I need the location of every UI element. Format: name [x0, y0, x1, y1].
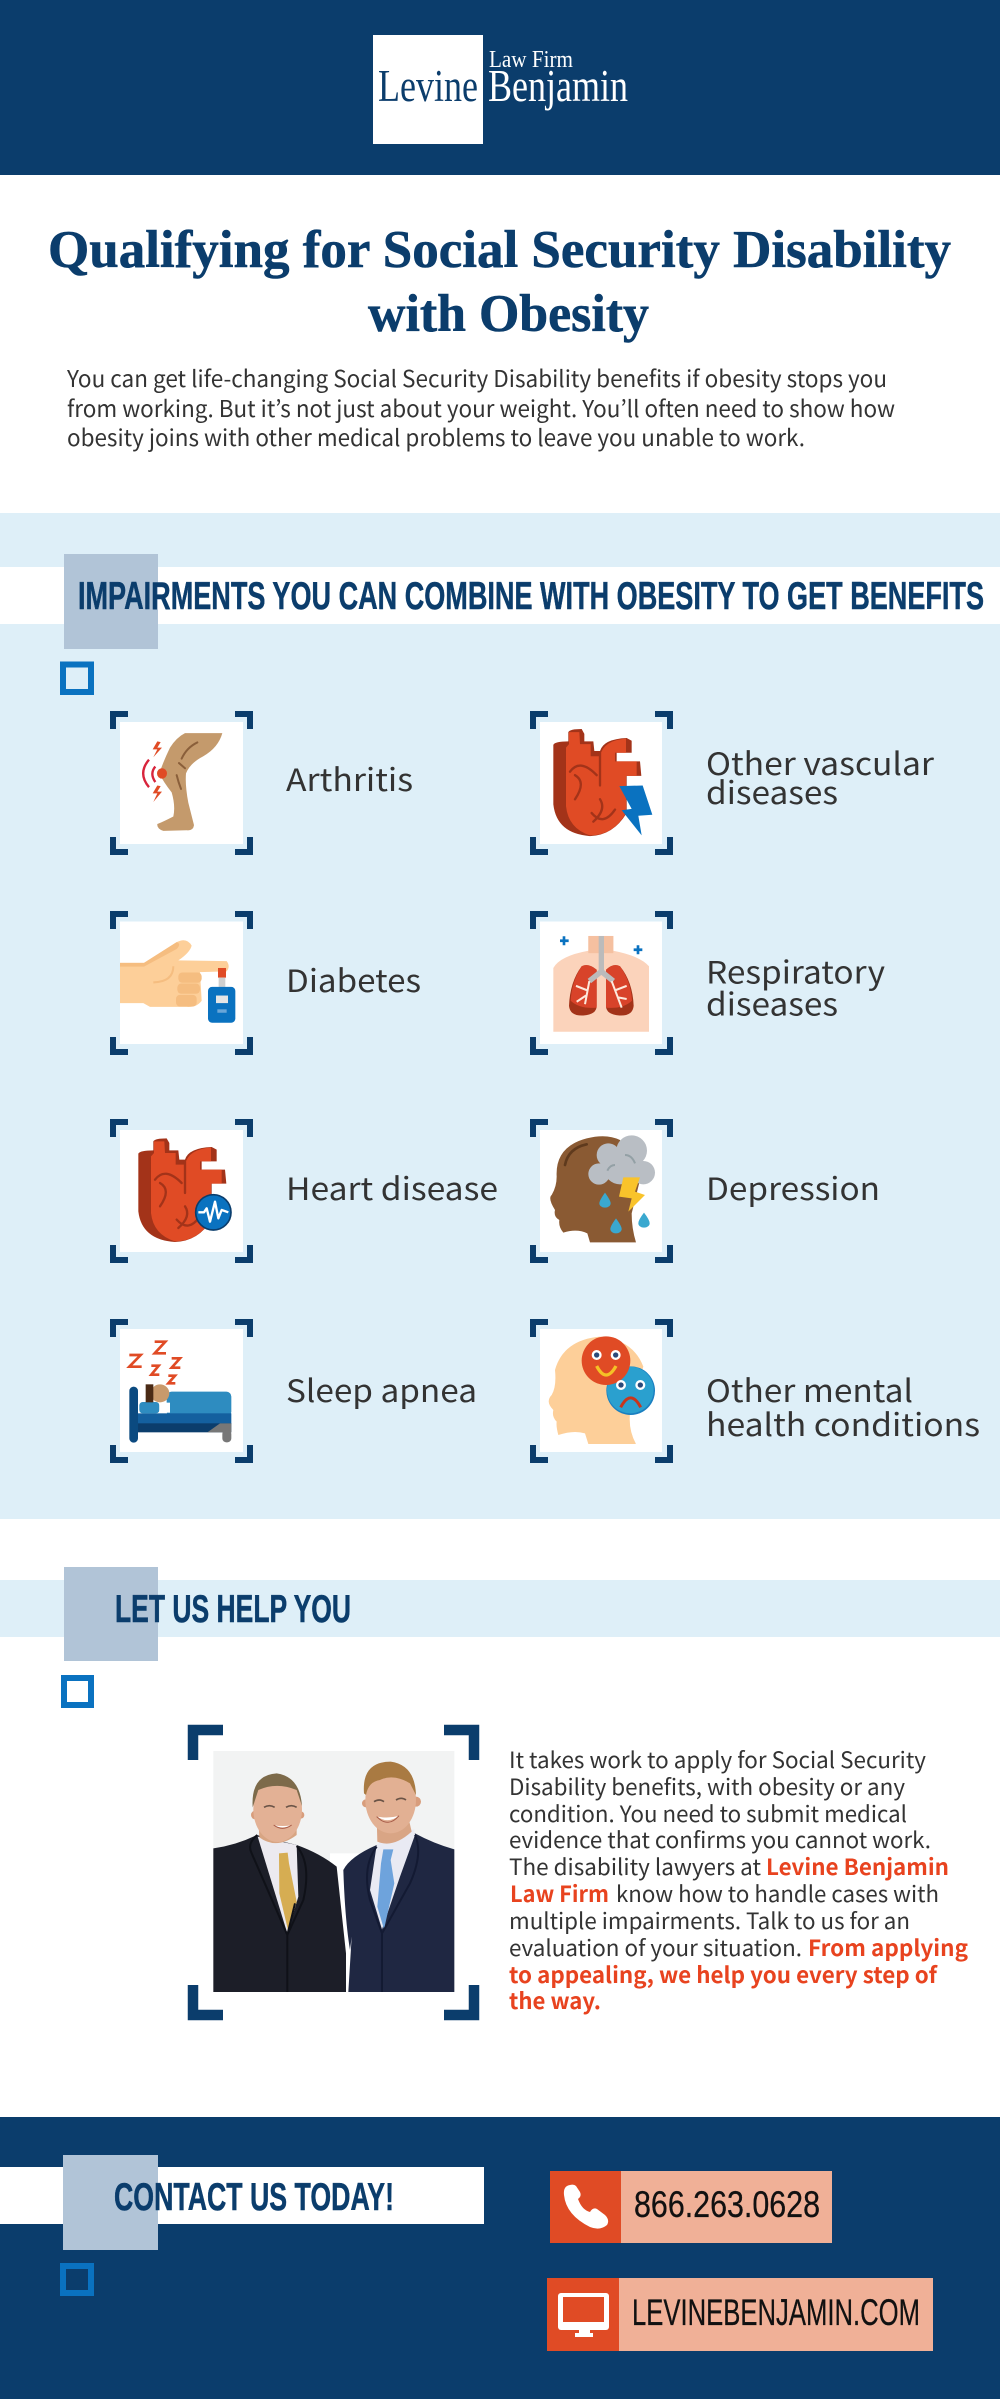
label: diseases — [706, 980, 838, 1024]
help paragraph: The disability lawyers at — [509, 1850, 762, 1882]
icon: head with emoji faces — [549, 1336, 655, 1444]
help paragraph: to appealing, we help you every step of — [509, 1958, 939, 1990]
right attorney — [343, 1762, 454, 1992]
label: diseases — [706, 768, 838, 813]
label: Other vascular — [706, 739, 935, 784]
label — [706, 1366, 980, 1445]
label: Other mental — [706, 1366, 913, 1411]
intro paragraph: obesity joins with other medical problems to leave you unable to work. — [67, 419, 805, 453]
heading: let us help you: LET US HELP YOU — [115, 1588, 351, 1631]
heading accent square — [63, 2155, 158, 2250]
label — [706, 739, 935, 813]
logo — [373, 35, 628, 144]
item: depression — [533, 1122, 880, 1260]
heading accent square — [64, 1567, 158, 1661]
help paragraph: the way. — [509, 1984, 601, 2016]
help paragraph: It takes work to apply for Social Security — [509, 1743, 926, 1775]
heading accent square — [64, 554, 158, 649]
icon: leg — [143, 733, 222, 831]
intro paragraph — [66, 360, 895, 453]
icon: heart with pulse — [138, 1138, 226, 1242]
item: sleep apnea: Sleep apnea — [286, 1366, 477, 1411]
outlined blue square — [64, 1678, 91, 1705]
icon: phone — [564, 2185, 608, 2229]
photo: two attorneys — [213, 1751, 454, 1992]
item: respiratory diseases — [533, 914, 885, 1052]
label: health conditions — [706, 1400, 980, 1445]
panel: let us help you — [0, 1567, 1000, 2016]
logo: Benjamin — [488, 61, 628, 111]
help paragraph: Levine Benjamin — [766, 1850, 949, 1882]
title: Qualifying for Social Security Disability — [48, 221, 951, 279]
item: diabetes — [113, 914, 421, 1052]
left attorney — [213, 1773, 346, 1992]
panel: contact — [0, 2117, 1000, 2399]
icon: lungs — [553, 936, 649, 1032]
label: Respiratory — [706, 948, 885, 992]
help paragraph: Disability benefits, with obesity or any — [509, 1770, 905, 1802]
phone button: 866.263.0628 — [634, 2184, 820, 2225]
icon: sleeping person in bed — [129, 1342, 231, 1443]
panel: impairments — [0, 513, 1000, 1519]
logo: Law Firm — [489, 47, 573, 73]
help paragraph: Law Firm — [510, 1877, 609, 1909]
item: diabetes: Diabetes — [286, 956, 421, 1001]
help paragraph: From applying — [808, 1931, 969, 1963]
heading: contact us today: CONTACT US TODAY! — [114, 2176, 394, 2219]
intro paragraph: from working. But it’s not just about your weight. You’ll often need to show how — [67, 390, 895, 424]
item: arthritis: Arthritis — [286, 755, 413, 800]
icon: heart with bolt — [553, 729, 652, 836]
title: with Obesity — [368, 285, 649, 343]
item: depression: Depression — [706, 1164, 880, 1209]
help paragraph: condition. You need to submit medical — [509, 1797, 907, 1829]
header panel — [0, 0, 1000, 175]
outlined blue square — [63, 664, 91, 692]
item: arthritis — [113, 714, 413, 852]
photo brackets — [193, 1730, 474, 2015]
item: heart disease: Heart disease — [286, 1164, 498, 1209]
help paragraph: evidence that confirms you cannot work. — [509, 1823, 931, 1855]
logo: Levine — [378, 61, 478, 111]
help paragraph — [509, 1743, 969, 2016]
label — [706, 948, 885, 1024]
help paragraph: evaluation of your situation. — [509, 1931, 802, 1963]
item: other mental health conditions — [533, 1322, 980, 1460]
item: other vascular diseases — [533, 714, 935, 852]
help paragraph: know how to handle cases with — [616, 1877, 939, 1909]
website button — [547, 2278, 933, 2351]
item: heart disease — [113, 1122, 498, 1260]
icon: finger and glucose meter — [120, 940, 235, 1023]
item: sleep apnea — [113, 1322, 477, 1460]
icon: monitor — [558, 2293, 609, 2337]
intro paragraph: You can get life-changing Social Security Disability benefits if obesity stops you — [66, 360, 887, 394]
outlined blue square — [63, 2266, 91, 2293]
icon: head with storm cloud — [550, 1135, 655, 1242]
help paragraph: multiple impairments. Talk to us for an — [509, 1904, 910, 1936]
title — [48, 221, 951, 343]
phone button — [550, 2171, 832, 2243]
